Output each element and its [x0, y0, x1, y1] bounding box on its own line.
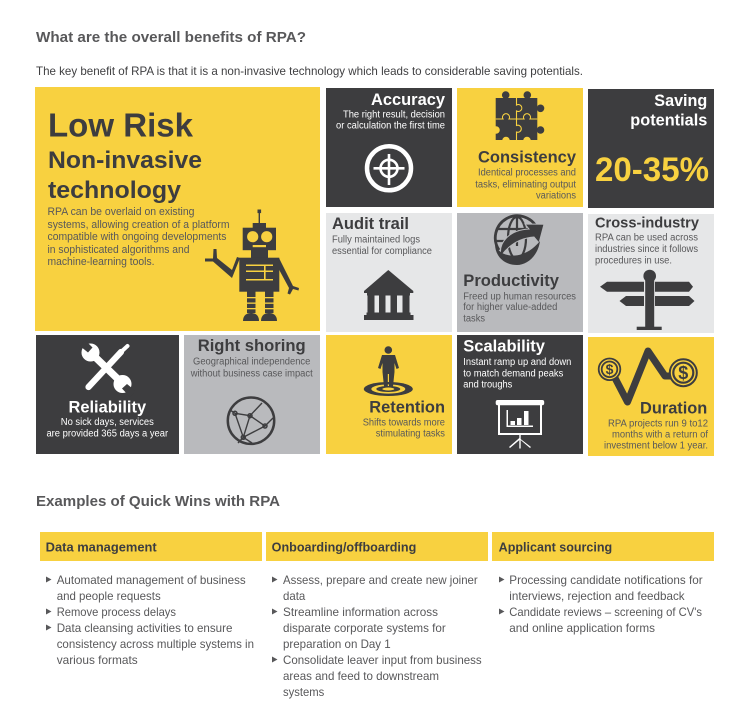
- icon: signpost: [600, 270, 694, 330]
- productivity description: [463, 291, 576, 325]
- bullet list: applicant sourcing: Processing candidate notifications for: [509, 573, 703, 587]
- heading: audit trail: Audit trail: [332, 214, 409, 233]
- reliability description: are provided 365 days a year: [46, 429, 169, 440]
- icon: puzzle: [492, 91, 544, 144]
- consistency description: tasks, eliminating output: [475, 179, 576, 190]
- heading: low risk: Low Risk: [48, 106, 194, 144]
- bullet list: applicant sourcing: Candidate reviews – screening of CV's: [509, 605, 702, 619]
- heading: saving potentials: Saving: [654, 92, 707, 110]
- column: applicant sourcing: [492, 532, 714, 635]
- reliability description: [46, 417, 169, 440]
- scalability description: to match demand peaks: [463, 369, 563, 380]
- retention description: Shifts towards more: [363, 418, 445, 429]
- right shoring description: without business case impact: [190, 369, 313, 380]
- icon: zigzag with dollar coins: $: [678, 363, 688, 383]
- icon: robot: [205, 210, 299, 321]
- bullet list: onboarding/offboarding: [272, 573, 482, 699]
- heading: saving potentials: [630, 92, 707, 130]
- low risk description: machine-learning tools.: [48, 256, 154, 268]
- low risk description: [48, 206, 230, 268]
- panel: duration: [588, 337, 714, 456]
- icon: zigzag with dollar coins: [599, 351, 697, 402]
- consistency description: Identical processes and: [478, 168, 576, 179]
- retention description: [363, 418, 445, 440]
- right shoring description: Geographical independence: [193, 356, 311, 367]
- panel: saving potentials: [588, 89, 714, 208]
- section heading: quick wins: Examples of Quick Wins with RPA: [36, 493, 280, 510]
- panel: reliability: [36, 335, 179, 454]
- icon: zigzag with dollar coins: $: [606, 361, 614, 377]
- heading: saving potentials: potentials: [630, 112, 707, 130]
- heading: right shoring: Right shoring: [198, 336, 306, 355]
- intro sentence: The key benefit of RPA is that it is a non-invasive technology which leads to considerable saving potentials.: [36, 64, 583, 78]
- bullet list: applicant sourcing: interviews, rejection and feedback: [509, 589, 686, 603]
- icon: presentation board: [496, 400, 544, 448]
- column heading: onboarding/offboarding: Onboarding/offboarding: [272, 541, 416, 555]
- heading: retention: Retention: [369, 398, 445, 417]
- low risk description: RPA can be overlaid on existing: [48, 206, 194, 218]
- scalability description: and troughs: [463, 380, 512, 391]
- reliability description: No sick days, services: [61, 417, 154, 428]
- subheading: non-invasive technology: Non-invasive: [48, 147, 202, 174]
- accuracy description: [336, 110, 445, 132]
- panel: right shoring: [184, 335, 320, 454]
- icon: person on target: [364, 346, 413, 396]
- bullet list: data management: Remove process delays: [57, 605, 176, 619]
- audit trail description: [332, 234, 432, 257]
- cross-industry description: RPA can be used across: [595, 233, 698, 244]
- heading: consistency: Consistency: [478, 148, 577, 167]
- heading: productivity: Productivity: [463, 271, 560, 290]
- panel: cross-industry: [588, 214, 714, 333]
- heading: reliability: Reliability: [68, 398, 147, 417]
- heading: accuracy: Accuracy: [371, 90, 446, 109]
- panel: scalability: [457, 335, 583, 454]
- accuracy description: The right result, decision: [343, 110, 445, 121]
- panel: low risk: [35, 87, 320, 331]
- bullet list: data management: consistency across multiple systems in: [57, 637, 254, 651]
- bullet list: data management: [46, 573, 254, 667]
- heading: duration: Duration: [640, 398, 707, 417]
- productivity description: tasks: [463, 314, 485, 325]
- bullet list: onboarding/offboarding: disparate corporate systems for: [283, 621, 446, 635]
- bullet list: data management: Automated management of business: [57, 573, 246, 587]
- duration description: RPA projects run 9 to12: [608, 419, 708, 430]
- bullet list: onboarding/offboarding: data: [283, 589, 306, 603]
- panel: audit trail: [326, 213, 452, 332]
- bullet list: onboarding/offboarding: Assess, prepare and create new joiner: [283, 573, 478, 587]
- bullet list: data management: various formats: [57, 653, 138, 667]
- productivity description: Freed up human resources: [463, 291, 576, 302]
- cross-industry description: industries since it follows: [595, 244, 698, 255]
- icon: globe with arrow: [495, 216, 544, 265]
- duration description: months with a return of: [612, 430, 708, 441]
- bullet list: onboarding/offboarding: preparation on Day 1: [283, 637, 391, 651]
- audit trail description: essential for compliance: [332, 246, 432, 257]
- cross-industry description: procedures in use.: [595, 256, 672, 267]
- scalability description: Instant ramp up and down: [463, 357, 571, 368]
- bullet list: onboarding/offboarding: areas and feed to downstream: [283, 669, 439, 683]
- bullet list: applicant sourcing: [499, 573, 703, 635]
- panel: productivity: [457, 213, 583, 332]
- column heading: data management: Data management: [46, 541, 158, 555]
- icon: target: [367, 146, 411, 190]
- figure: 20-35%: 20-35%: [595, 151, 709, 189]
- consistency description: [475, 168, 576, 201]
- bullet list: applicant sourcing: and online application forms: [509, 621, 655, 635]
- subheading: non-invasive technology: technology: [48, 177, 182, 204]
- column: data management: [40, 532, 262, 667]
- icon: wrench and screwdriver: [80, 340, 136, 397]
- scalability description: [463, 357, 571, 391]
- consistency description: variations: [536, 190, 576, 201]
- bullet list: onboarding/offboarding: systems: [283, 685, 324, 699]
- icon: bank building: [364, 270, 414, 320]
- right shoring description: [190, 356, 313, 380]
- heading: scalability: Scalability: [463, 337, 546, 356]
- bullet list: data management: Data cleansing activities to ensure: [57, 621, 233, 635]
- duration description: [604, 419, 708, 451]
- title: What are the overall benefits of RPA?: [36, 29, 306, 46]
- column heading: applicant sourcing: Applicant sourcing: [499, 541, 612, 555]
- productivity description: for higher value-added: [463, 302, 557, 313]
- bullet list: onboarding/offboarding: Consolidate leaver input from business: [283, 653, 482, 667]
- cross-industry description: [595, 233, 698, 267]
- subheading: non-invasive technology: [48, 147, 202, 204]
- panel: accuracy: [326, 88, 452, 207]
- low risk description: systems, allowing creation of a platform: [48, 219, 230, 231]
- bullet list: onboarding/offboarding: Streamline information across: [283, 605, 438, 619]
- bullet list: data management: and people requests: [57, 589, 161, 603]
- low risk description: compatible with ongoing developments: [48, 231, 227, 243]
- accuracy description: or calculation the first time: [336, 121, 445, 132]
- panel: retention: [326, 335, 452, 454]
- panel: consistency: [457, 88, 583, 207]
- audit trail description: Fully maintained logs: [332, 234, 420, 245]
- column: onboarding/offboarding: [266, 532, 488, 699]
- duration description: investment below 1 year.: [604, 440, 708, 451]
- icon: network globe: [228, 398, 274, 444]
- heading: cross-industry: Cross-industry: [595, 215, 700, 232]
- low risk description: in sophisticated algorithms and: [48, 244, 190, 256]
- retention description: stimulating tasks: [376, 429, 445, 440]
